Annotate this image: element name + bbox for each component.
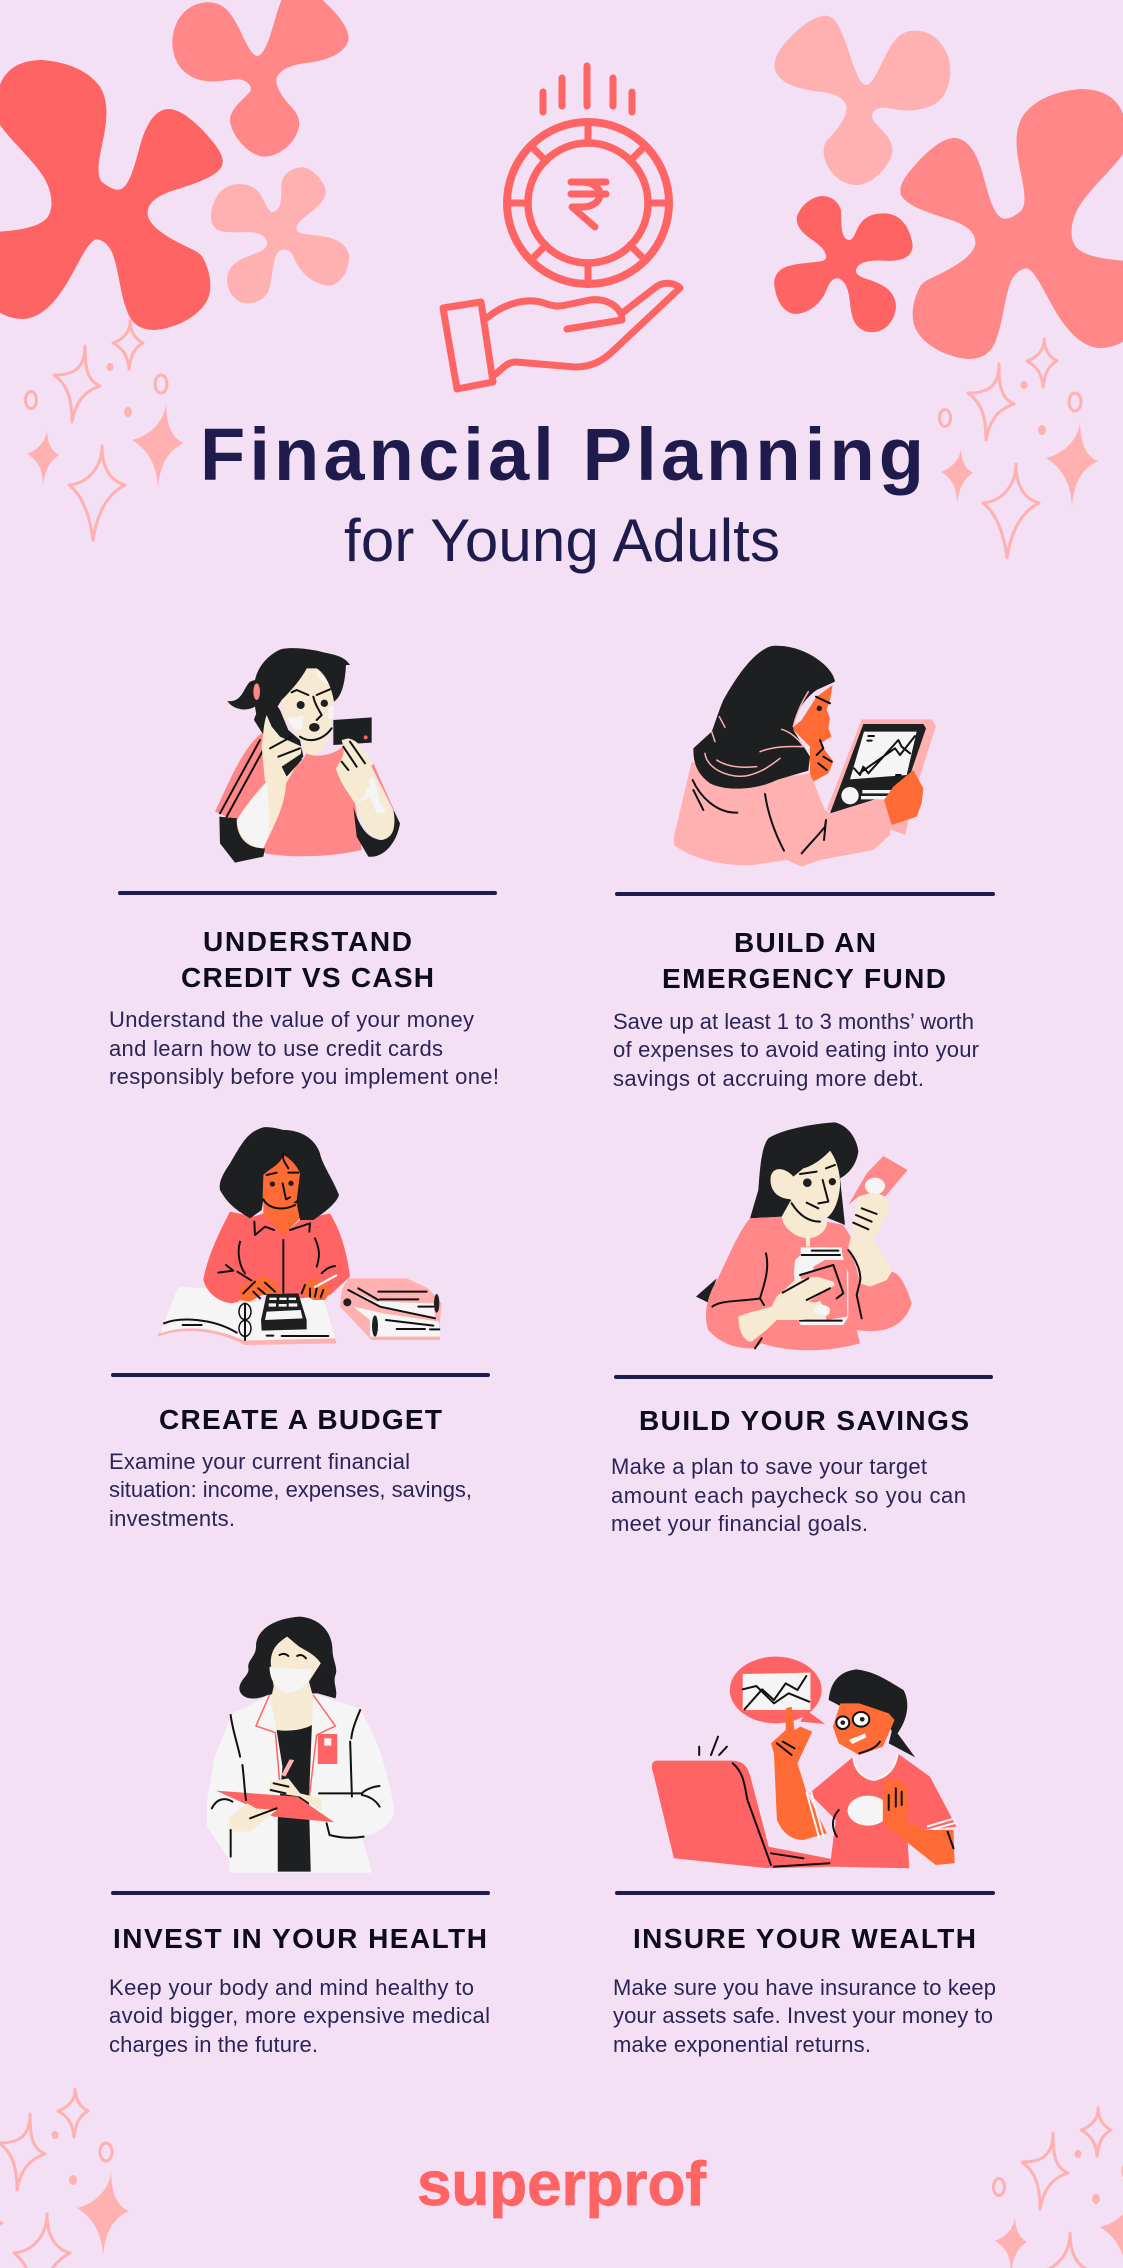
body text [611, 1454, 966, 1536]
body text: Make sure you have insurance to keep [613, 1975, 996, 2000]
blob: salmon top left [172, 0, 349, 157]
panel: invest in your health [109, 1617, 490, 2057]
body text: and learn how to use credit cards [109, 1036, 443, 1061]
body text: charges in the future. [109, 2032, 318, 2057]
body text: avoid bigger, more expensive medical [109, 2003, 490, 2028]
blob: large red top left [0, 60, 223, 330]
divider [111, 1891, 490, 1895]
panel: understand credit vs cash [109, 648, 499, 1089]
heading: CREATE A BUDGET [159, 1404, 442, 1435]
panel: build your savings [611, 1122, 993, 1536]
illustration: woman on phone holding a credit card [215, 648, 400, 863]
sparkles: bottom right [994, 2108, 1123, 2268]
blob: light pink top right [775, 16, 950, 185]
sparkles: bottom left [0, 2089, 129, 2268]
divider [111, 1373, 490, 1377]
panel: build an emergency fund [613, 646, 995, 1091]
subtitle: for Young Adults [344, 507, 780, 574]
body text [109, 1975, 490, 2057]
heading: BUILD YOUR SAVINGS [639, 1405, 969, 1436]
icon: rupee coin on open hand [443, 66, 680, 389]
divider [118, 891, 497, 895]
body text: Examine your current financial [109, 1449, 410, 1474]
logo: superprof: superprof [417, 2150, 706, 2219]
body text: responsibly before you implement one! [109, 1064, 499, 1089]
illustration: doctor with clipboard and mask [207, 1617, 394, 1873]
body text: your assets safe. Invest your money to [613, 2003, 993, 2028]
illustration: woman with calculator and binders [157, 1127, 442, 1345]
blob: large salmon top right [900, 89, 1123, 359]
blob: light pink top left [211, 167, 349, 303]
blob: red top right [774, 196, 913, 332]
divider [614, 1375, 993, 1379]
body text: Keep your body and mind healthy to [109, 1975, 474, 2000]
body text: of expenses to avoid eating into your [613, 1037, 979, 1062]
divider [615, 1891, 995, 1895]
body text: investments. [109, 1506, 235, 1531]
sparkles: top left [26, 321, 184, 540]
body text [613, 1975, 996, 2057]
panel: create a budget [109, 1127, 490, 1531]
heading [181, 926, 434, 993]
title: Financial Planning [200, 413, 924, 496]
body text [109, 1449, 472, 1531]
body text: savings ot accruing more debt. [613, 1066, 924, 1091]
heading: INSURE YOUR WEALTH [633, 1923, 976, 1954]
body text: Save up at least 1 to 3 months’ worth [613, 1009, 974, 1034]
heading: EMERGENCY FUND [662, 963, 946, 994]
heading: BUILD AN [734, 927, 876, 958]
sparkles: top right [940, 339, 1098, 558]
body text: situation: income, expenses, savings, [109, 1477, 472, 1502]
heading: INVEST IN YOUR HEALTH [113, 1923, 487, 1954]
body text: Understand the value of your money [109, 1007, 474, 1032]
body text [613, 1009, 979, 1091]
body text [109, 1007, 499, 1089]
heading [662, 927, 946, 994]
body text: meet your financial goals. [611, 1511, 868, 1536]
heading: UNDERSTAND [203, 926, 412, 957]
body text: Make a plan to save your target [611, 1454, 927, 1479]
panel: insure your wealth [613, 1657, 996, 2057]
illustration: woman in hijab studying a tablet [674, 646, 936, 867]
body text: amount each paycheck so you can [611, 1483, 966, 1508]
divider [615, 892, 995, 896]
illustration: woman holding a savings jar and banknote [696, 1122, 912, 1350]
illustration: woman with laptop and chart speech bubble [652, 1657, 956, 1868]
heading: CREDIT VS CASH [181, 962, 434, 993]
body text: make exponential returns. [613, 2032, 871, 2057]
